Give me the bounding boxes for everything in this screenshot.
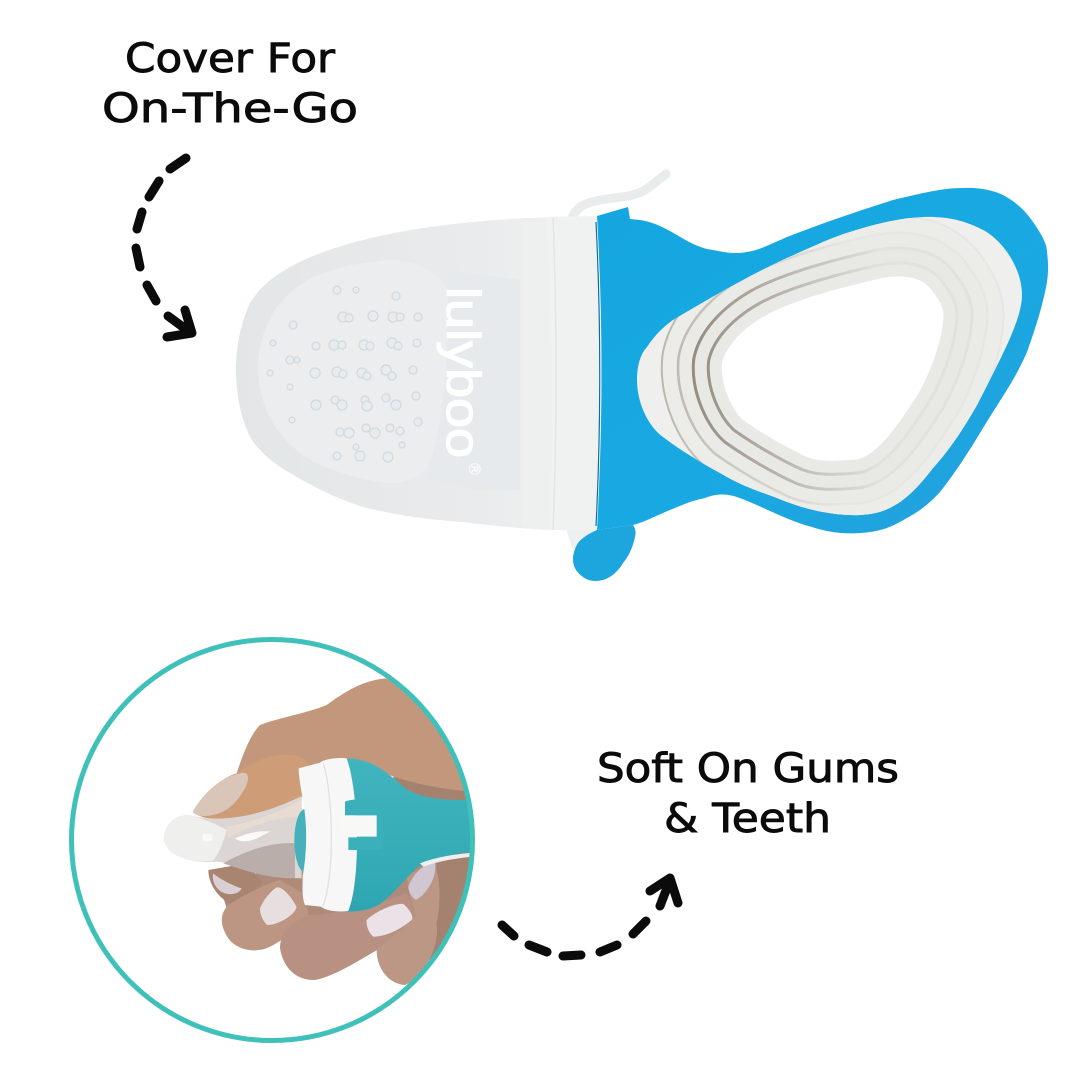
feeder handle xyxy=(347,758,473,912)
tab: blue pull tab xyxy=(573,525,636,581)
ridges: concentric grooves xyxy=(722,277,944,461)
photo: hand squeezing feeder in teal circle xyxy=(72,640,473,1040)
hand: back of hand xyxy=(237,678,473,798)
ring: white collar xyxy=(546,216,600,530)
heading: soft on gums and teeth xyxy=(597,746,899,842)
rim: white ridged ring xyxy=(630,210,1030,520)
logo: lulyboo: ® xyxy=(465,461,484,477)
heading: cover for on-the-go xyxy=(102,36,358,132)
mesh: inner silicone pouch xyxy=(258,222,547,527)
heading: soft on gums and teeth: Soft On Gums xyxy=(597,746,899,792)
disc: teal base xyxy=(294,809,306,872)
heading: cover for on-the-go: Cover For xyxy=(125,36,336,82)
circle outline xyxy=(72,640,472,1040)
collar: white ring xyxy=(299,758,357,911)
clip hook xyxy=(571,174,666,222)
nails xyxy=(213,862,435,937)
arrow: curved dashed arrow to the cover xyxy=(136,158,192,337)
heading: cover for on-the-go: On-The-Go xyxy=(102,86,358,132)
heading: soft on gums and teeth: & Teeth xyxy=(664,796,831,842)
logo: lulyboo: lulyboo xyxy=(437,287,490,458)
thumbnail xyxy=(193,773,248,816)
handle hole xyxy=(722,277,944,461)
pouch: translucent silicone xyxy=(164,796,302,878)
thumb xyxy=(193,755,308,821)
cover: translucent dome xyxy=(236,217,557,530)
wrist shadow xyxy=(393,777,473,963)
arrow: curved dashed arrow to label xyxy=(502,878,678,956)
handle: blue body xyxy=(597,188,1048,533)
white tab base xyxy=(566,528,600,552)
finger base xyxy=(224,864,436,917)
clip: teal hinge xyxy=(345,800,357,850)
hand: fingers xyxy=(208,862,439,985)
product: fruit feeder xyxy=(236,174,1048,581)
mesh dots xyxy=(267,286,422,462)
